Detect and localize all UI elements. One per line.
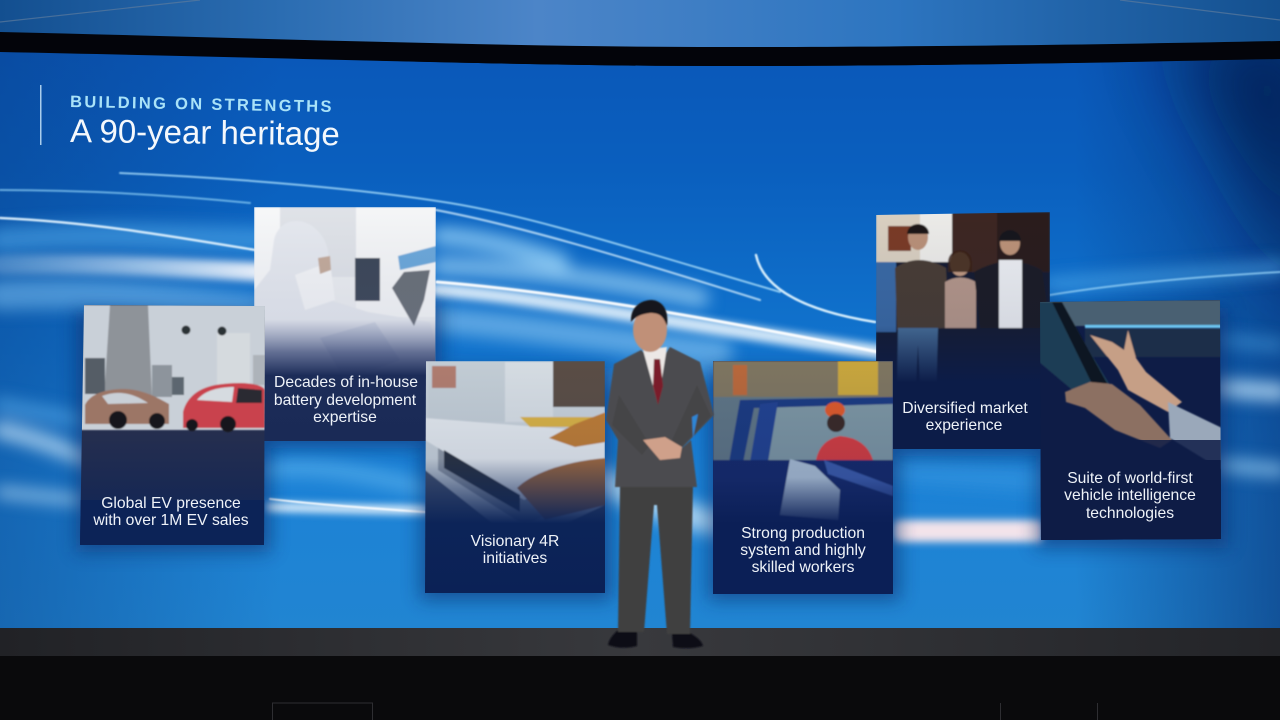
- eyebrow: BUILDING ON STRENGTHS: [70, 93, 334, 116]
- card: vehicle intelligence: [1039, 300, 1222, 540]
- head: [633, 308, 667, 352]
- caption: Visionary 4R: [471, 533, 559, 550]
- title: A 90-year heritage: [70, 112, 340, 152]
- card: diversified market: [876, 212, 1050, 449]
- caption: Strong production: [741, 525, 865, 542]
- card: battery development: [254, 207, 436, 441]
- ceiling strip: [0, 0, 1280, 60]
- speaker: [606, 300, 714, 648]
- card: global EV presence: [80, 305, 266, 545]
- card: 4R initiatives: [425, 361, 606, 593]
- caption: with over 1M EV sales: [92, 512, 249, 529]
- caption: vehicle intelligence: [1064, 487, 1196, 504]
- caption: battery development: [274, 392, 417, 409]
- light streaks: [0, 173, 1280, 522]
- card shadows: [76, 300, 1228, 600]
- caption: technologies: [1086, 505, 1174, 522]
- glowing bar below diversified market card: [893, 520, 1043, 542]
- caption: Decades of in-house: [274, 374, 418, 391]
- jacket: [606, 347, 714, 487]
- shoes: [608, 630, 703, 648]
- hands: [643, 437, 682, 460]
- caption: Diversified market: [902, 400, 1028, 417]
- trousers: [618, 484, 693, 634]
- caption: Global EV presence: [101, 495, 241, 512]
- caption: expertise: [313, 409, 377, 426]
- shirt and tie: [643, 347, 667, 404]
- caption: initiatives: [483, 550, 547, 567]
- caption: Suite of world-first: [1067, 470, 1193, 487]
- caption: system and highly: [740, 542, 866, 559]
- caption: experience: [926, 417, 1003, 434]
- stage floor: [0, 628, 1280, 720]
- caption: skilled workers: [752, 559, 855, 576]
- card: production system: [713, 361, 893, 594]
- black bulkhead band: [0, 32, 1280, 66]
